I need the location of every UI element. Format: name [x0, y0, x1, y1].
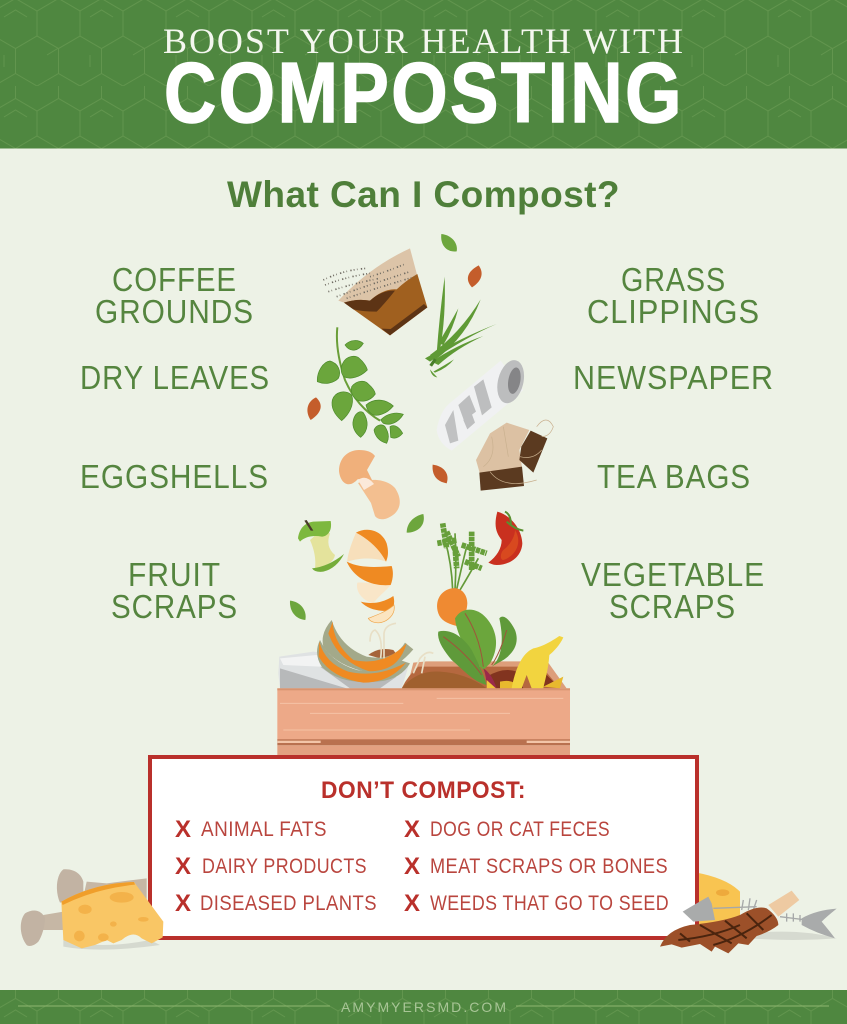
label: vegetable scraps: SCRAPS	[609, 588, 736, 625]
label: vegetable scraps: VEGETABLE	[581, 556, 765, 593]
icon: grass clippings	[425, 277, 497, 377]
list: right column: MEAT SCRAPS OR BONES	[430, 855, 668, 878]
icon: melon rinds	[317, 620, 413, 683]
list: right column: WEEDS THAT GO TO SEED	[430, 892, 669, 915]
list: left column	[175, 816, 377, 917]
footer url: AMYMYERSMD.COM	[341, 999, 506, 1015]
icon: beet leaves	[438, 610, 517, 688]
footer band	[0, 990, 847, 1024]
icon: eggshells	[339, 450, 400, 519]
icon: crate	[277, 688, 570, 755]
illustrations lower: fruit and vegetable scraps	[277, 512, 570, 755]
list: left column: X	[175, 816, 192, 843]
bone stub	[768, 891, 799, 917]
icon: dry leaf top right	[468, 265, 482, 287]
label: tea bags: TEA BAGS	[597, 458, 751, 495]
label: coffee grounds	[95, 261, 254, 330]
list: left column: DAIRY PRODUCTS	[202, 855, 367, 878]
list: left column: X	[175, 890, 192, 917]
list: left column: X	[175, 853, 192, 880]
label: grass clippings: CLIPPINGS	[587, 293, 760, 330]
list: right column: X	[404, 890, 421, 917]
label: grass clippings	[587, 261, 760, 330]
icon: crate back rim	[407, 661, 567, 688]
icon: herb sprig	[317, 327, 403, 443]
list: right column: X	[404, 853, 421, 880]
icon: cheese left	[61, 882, 163, 948]
icon: orange peel spiral	[347, 530, 394, 623]
label: coffee grounds: COFFEE	[112, 261, 237, 298]
shadow	[750, 932, 837, 940]
label: dry leaves: DRY LEAVES	[80, 359, 270, 396]
icon: coffee filter with grounds	[323, 248, 427, 335]
icon: leaf center	[407, 514, 424, 533]
icon: tea bag	[476, 420, 553, 491]
list: left column: DISEASED PLANTS	[200, 892, 377, 915]
label: fruit scraps: SCRAPS	[111, 588, 238, 625]
icon: banana peel	[500, 636, 563, 688]
label: coffee grounds: GROUNDS	[95, 293, 254, 330]
heading: what can I compost: What Can I Compost?	[227, 174, 620, 215]
icon: dry leaf left	[307, 397, 321, 420]
list: right column	[404, 816, 669, 917]
icon: leaf top	[441, 234, 457, 251]
compostable labels left	[80, 261, 270, 625]
label: eggshells: EGGSHELLS	[80, 458, 269, 495]
compostable labels right	[573, 261, 774, 625]
label: newspaper: NEWSPAPER	[573, 359, 774, 396]
header banner	[0, 0, 847, 148]
fish skeleton	[713, 898, 807, 922]
panel: don't compost	[150, 757, 697, 938]
steak	[660, 907, 778, 953]
icon: leaf left	[290, 601, 306, 620]
label: fruit scraps	[111, 556, 238, 625]
icon: dry leaf center	[433, 465, 448, 483]
list: right column: DOG OR CAT FECES	[430, 818, 610, 841]
label: grass clippings: GRASS	[621, 261, 726, 298]
icon: rolled newspaper	[437, 357, 528, 451]
list: right column: X	[404, 816, 421, 843]
label: fruit scraps: FRUIT	[128, 556, 221, 593]
bones left	[21, 869, 160, 950]
list: left column: ANIMAL FATS	[201, 818, 327, 841]
label: vegetable scraps	[581, 556, 765, 625]
icon: apple core	[298, 520, 344, 572]
icon: sprouts	[370, 623, 433, 673]
cheese right, behind box	[697, 873, 740, 927]
title: composting: COMPOSTING	[164, 46, 684, 141]
icon: tomato	[488, 512, 523, 565]
icon: newspaper pile	[278, 652, 408, 688]
heading: don't compost: DON’T COMPOST:	[321, 777, 526, 804]
title: boost your health with: BOOST YOUR HEALTH WITH	[163, 21, 683, 61]
icon: compost soil	[368, 649, 560, 688]
icon: steak, fish and bone	[660, 891, 837, 953]
icon: carrot with greens	[437, 523, 487, 626]
illustrations upper: falling compost	[307, 234, 553, 491]
